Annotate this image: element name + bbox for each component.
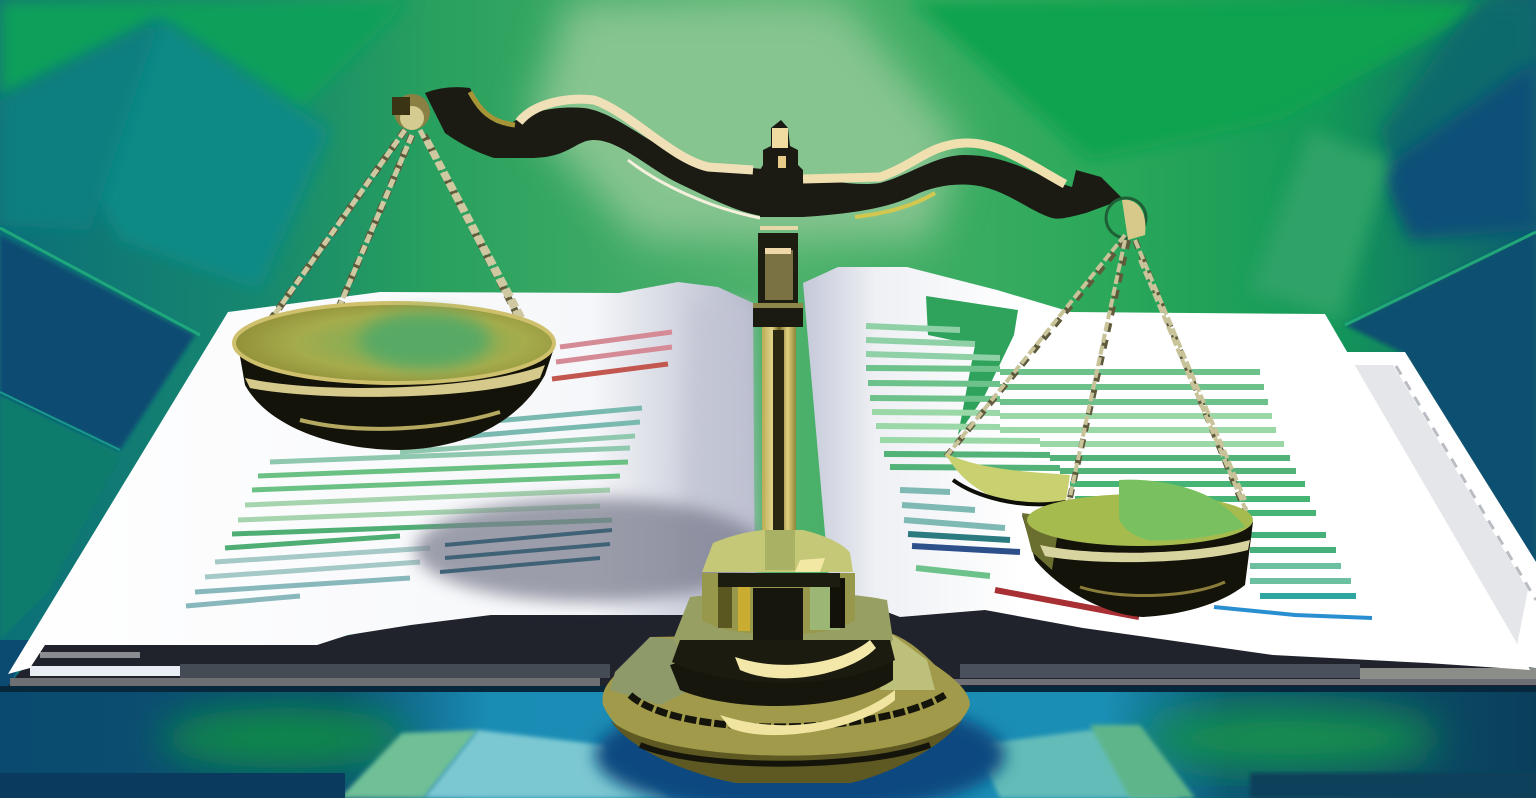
left page: [8, 282, 755, 674]
stand column: [753, 226, 803, 550]
table surface: [0, 686, 1536, 798]
right page text lines: [866, 326, 1372, 618]
small left dish of right pan: [945, 453, 1070, 505]
finial: [760, 120, 803, 217]
beam end joints: [394, 94, 430, 130]
left page text lines: [186, 332, 672, 606]
beam: [392, 87, 1146, 240]
left page pan shadow: [415, 498, 765, 602]
green bookmark mark: [926, 296, 1018, 435]
left chains: [272, 130, 540, 350]
center fold shadow: [680, 300, 760, 600]
book cover and lower bands: [8, 605, 1536, 686]
right chains: [945, 235, 1250, 520]
back sheet on right side: [1340, 352, 1536, 668]
open book: [8, 267, 1536, 686]
left pan: [234, 303, 555, 450]
scale: [234, 87, 1253, 783]
right pan: [1022, 480, 1253, 617]
base: [602, 530, 970, 783]
right page: [803, 267, 1530, 670]
